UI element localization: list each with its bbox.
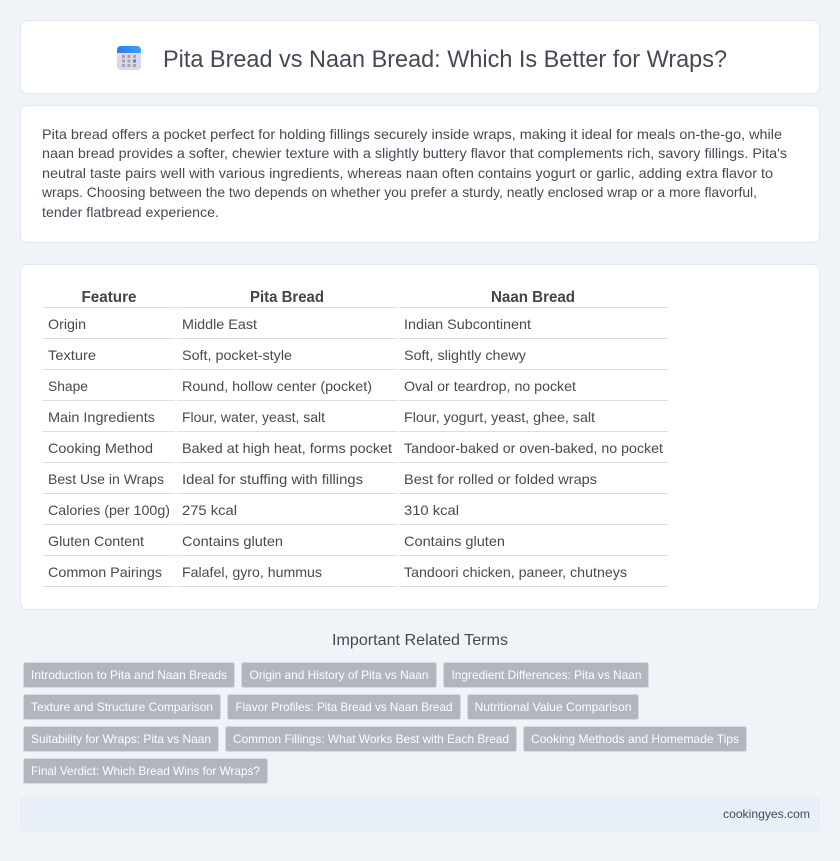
tag: Suitability for Wraps: Pita vs Naan (31, 732, 211, 746)
text block: introduction paragraph: wraps. Choosing between the two depends on whether you prefer a sturdy, neatly enclosed wrap or a more flavorful, (41, 184, 757, 200)
tag (468, 694, 638, 720)
tag: Texture and Structure Comparison (31, 700, 213, 714)
row: calories: 310 kcal (404, 502, 459, 518)
row: main ingredients (48, 409, 595, 425)
row: gluten content: Contains gluten (404, 533, 505, 549)
tag: Ingredient Differences: Pita vs Naan (452, 668, 642, 682)
row: cooking method: Baked at high heat, forms pocket (182, 440, 392, 456)
tag: Flavor Profiles: Pita Bread vs Naan Bread (236, 700, 452, 714)
row: texture: Soft, pocket-style (182, 347, 292, 363)
row: origin: Origin (48, 316, 86, 332)
table header row: Feature (82, 289, 137, 306)
row: texture: Texture (48, 347, 96, 363)
row: calories: 275 kcal (182, 502, 237, 518)
row: common pairings: Falafel, gyro, hummus (182, 564, 322, 580)
row: cooking method (48, 440, 663, 456)
tag (226, 726, 516, 752)
row: shape: Round, hollow center (pocket) (182, 378, 372, 394)
row: calories (48, 502, 459, 518)
row: origin: Middle East (182, 316, 257, 332)
row: best use in wraps: Best Use in Wraps (48, 471, 164, 487)
tag: Origin and History of Pita vs Naan (250, 668, 428, 682)
related term tags (24, 662, 746, 784)
row: texture (48, 347, 526, 363)
row: common pairings: Tandoori chicken, paneer, chutneys (404, 564, 627, 580)
row: calories: Calories (per 100g) (48, 502, 170, 518)
row: texture: Soft, slightly chewy (404, 347, 526, 363)
row: gluten content (48, 533, 505, 549)
row: shape: Oval or teardrop, no pocket (404, 378, 576, 394)
panel: introduction (20, 106, 820, 242)
row: origin: Indian Subcontinent (404, 316, 531, 332)
panel: header (20, 20, 820, 94)
row: best use in wraps: Best for rolled or folded wraps (404, 471, 597, 487)
row: common pairings (48, 564, 627, 580)
row: best use in wraps: Ideal for stuffing with fillings (182, 471, 363, 487)
footer (20, 797, 820, 831)
table header row: Pita Bread (250, 289, 324, 306)
tag: Common Fillings: What Works Best with Each Bread (233, 732, 509, 746)
tag (242, 662, 436, 688)
row: shape (48, 378, 576, 394)
tag (24, 758, 268, 784)
row: gluten content: Contains gluten (182, 533, 283, 549)
tag (24, 726, 218, 752)
table header row: Naan Bread (491, 289, 575, 306)
row: cooking method: Tandoor-baked or oven-baked, no pocket (404, 440, 663, 456)
footer source text: cookingyes.com (723, 807, 810, 821)
row: main ingredients: Flour, yogurt, yeast, ghee, salt (404, 409, 595, 425)
tag (524, 726, 746, 752)
title: Pita Bread vs Naan Bread: Which Is Better for Wraps? (163, 46, 727, 73)
table header row (82, 289, 575, 306)
row: common pairings: Common Pairings (48, 564, 162, 580)
text block: introduction paragraph: neutral taste pairs well with various ingredients, whereas naan often contains yogurt or garlic, adding extra flavor to (42, 165, 773, 181)
row: origin (48, 316, 531, 332)
text block: introduction paragraph: tender flatbread experience. (42, 204, 219, 220)
tag (444, 662, 648, 688)
panel: comparison table (20, 264, 820, 610)
tag: Nutritional Value Comparison (474, 700, 632, 714)
row: shape: Shape (48, 378, 88, 394)
tag (24, 662, 234, 688)
row: main ingredients: Flour, water, yeast, salt (182, 409, 325, 425)
text block: introduction paragraph (41, 126, 787, 220)
row: main ingredients: Main Ingredients (48, 409, 155, 425)
tag: Cooking Methods and Homemade Tips (531, 732, 739, 746)
tag: Final Verdict: Which Bread Wins for Wraps? (31, 764, 260, 778)
text block: introduction paragraph: Pita bread offers a pocket perfect for holding fillings securely inside wraps, making it ideal for meals on-the-go, while (42, 126, 782, 142)
text block: introduction paragraph: naan bread provides a softer, chewier texture with a slightly buttery flavor that complements rich, savory fillings. Pita's (42, 145, 787, 161)
icon: calendar (117, 46, 141, 70)
tag (228, 694, 460, 720)
row: best use in wraps (48, 471, 597, 487)
row: gluten content: Gluten Content (48, 533, 144, 549)
row: cooking method: Cooking Method (48, 440, 153, 456)
tag: Introduction to Pita and Naan Breads (31, 668, 227, 682)
heading: related terms: Important Related Terms (332, 632, 508, 649)
tag (24, 694, 220, 720)
